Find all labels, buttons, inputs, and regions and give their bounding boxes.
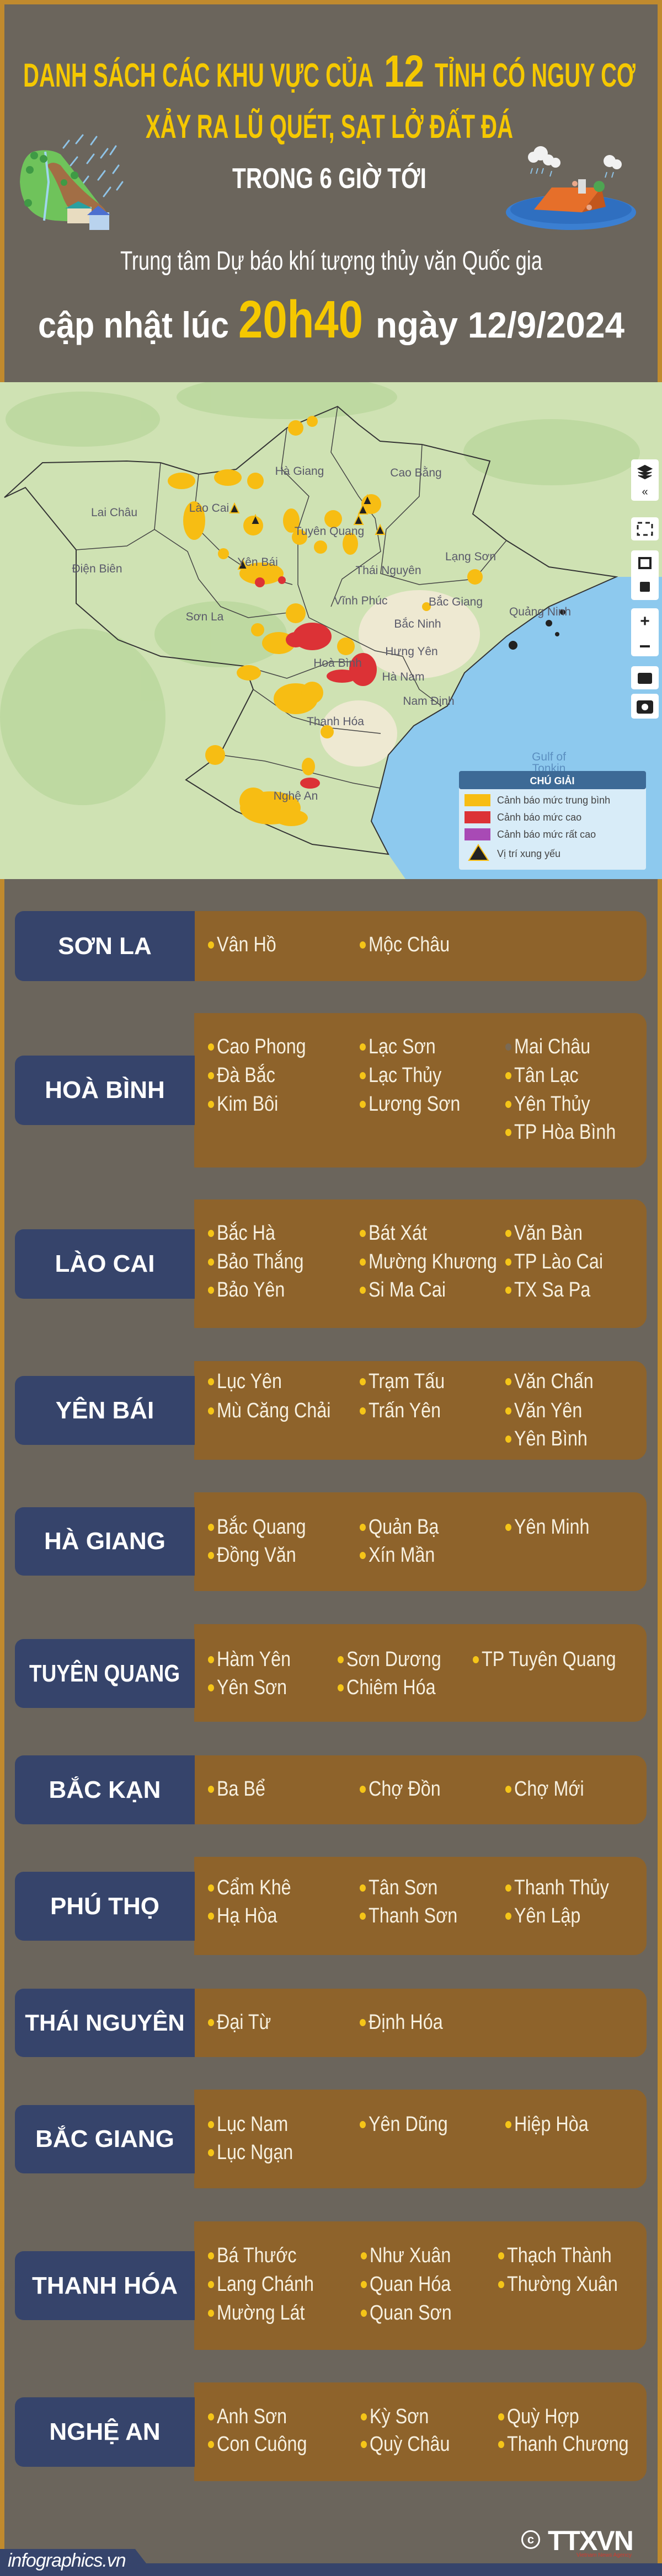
panel: Thanh Hóa: Quan Hóa bbox=[370, 2273, 451, 2296]
panel: Hoà Bình bbox=[15, 1013, 647, 1167]
update time line bbox=[38, 290, 624, 349]
panel: Lào Cai: TX Sa Pa bbox=[514, 1278, 590, 1302]
label: Sơn La: SƠN LA bbox=[58, 932, 152, 960]
panel: Yên Bái: Lục Yên bbox=[217, 1370, 282, 1393]
label: Lào Cai: LÀO CAI bbox=[55, 1250, 154, 1277]
panel: Tuyên Quang: Sơn Dương bbox=[346, 1648, 441, 1671]
label: Phú Thọ: PHÚ THỌ bbox=[50, 1893, 159, 1919]
panel: Bắc Giang: Lục Nam bbox=[217, 2113, 288, 2136]
panel: Lào Cai: Văn Bàn bbox=[514, 1222, 583, 1245]
label: Bắc Kạn bbox=[15, 1755, 195, 1824]
panel: Lào Cai: Bát Xát bbox=[369, 1222, 427, 1245]
map bbox=[0, 382, 662, 879]
legend: Cảnh báo mức cao bbox=[497, 812, 581, 823]
panel: Phú Thọ: Thanh Thủy bbox=[514, 1876, 609, 1899]
map toolbar: + bbox=[640, 612, 650, 630]
panel: Hà Giang: Xín Mần bbox=[369, 1544, 435, 1567]
subtitle source: Trung tâm Dự báo khí tượng thủy văn Quốc gia bbox=[120, 247, 542, 276]
panel: Hà Giang bbox=[15, 1492, 647, 1591]
panel: Hoà Bình: Lương Sơn bbox=[369, 1092, 460, 1116]
panel: Lào Cai bbox=[15, 1199, 647, 1328]
panel: Lào Cai: Bảo Thắng bbox=[217, 1250, 303, 1273]
panel: Nghệ An: Quỳ Châu bbox=[370, 2433, 450, 2456]
panel: Thái Nguyên bbox=[15, 1989, 647, 2057]
province labels: Hưng Yên bbox=[385, 645, 438, 658]
province labels: Hà Giang bbox=[275, 465, 324, 478]
sea bbox=[371, 577, 662, 879]
update time line: ngày 12/9/2024 bbox=[376, 304, 624, 345]
label: Hoà Bình bbox=[15, 1056, 195, 1125]
panel: Hà Giang: Bắc Quang bbox=[217, 1515, 306, 1539]
box: Phú Thọ list bbox=[194, 1857, 647, 1955]
map toolbar: « bbox=[642, 486, 648, 498]
box: Thái Nguyên list bbox=[194, 1989, 647, 2057]
label: Nghệ An: NGHỆ AN bbox=[49, 2418, 161, 2445]
legend: Cảnh báo mức rất cao bbox=[497, 829, 596, 840]
region outline bbox=[4, 406, 616, 854]
label: Phú Thọ bbox=[15, 1872, 195, 1941]
label: Tuyên Quang bbox=[15, 1639, 195, 1708]
update time line: cập nhật lúc bbox=[38, 304, 229, 345]
panel: Hoà Bình: Lạc Thủy bbox=[369, 1064, 441, 1087]
panel: Lào Cai: Bắc Hà bbox=[217, 1222, 275, 1245]
panel: Yên Bái: Trạm Tấu bbox=[369, 1370, 445, 1393]
panel: Hoà Bình: Tân Lạc bbox=[514, 1064, 579, 1087]
province labels: Sơn La bbox=[186, 610, 224, 623]
province labels: Thanh Hóa bbox=[307, 715, 364, 728]
panel: Hoà Bình: Kim Bôi bbox=[217, 1092, 278, 1116]
panel: Thanh Hóa: Quan Sơn bbox=[370, 2301, 452, 2325]
label: Yên Bái bbox=[15, 1376, 195, 1445]
panel: Bắc Giang: Lục Ngạn bbox=[217, 2141, 293, 2164]
warning areas bbox=[168, 416, 483, 826]
label: Thái Nguyên bbox=[15, 1989, 195, 2057]
panel: Bắc Kạn: Chợ Mới bbox=[514, 1777, 584, 1801]
panel: Tuyên Quang: Yên Sơn bbox=[217, 1676, 287, 1699]
province labels: Hoà Bình bbox=[313, 657, 362, 670]
panel: Sơn La bbox=[15, 911, 647, 981]
map toolbar bbox=[631, 459, 659, 719]
province labels: Nghệ An bbox=[274, 790, 318, 802]
panel: Thanh Hóa bbox=[15, 2221, 647, 2350]
panel: Nghệ An: Anh Sơn bbox=[217, 2405, 287, 2428]
panel: Bắc Giang: Hiệp Hòa bbox=[514, 2113, 589, 2136]
panel: Tuyên Quang: Hàm Yên bbox=[217, 1648, 291, 1671]
panel: Lào Cai: Si Ma Cai bbox=[369, 1278, 446, 1302]
province labels: Hà Nam bbox=[382, 671, 425, 683]
box: Bắc Giang list bbox=[194, 2090, 647, 2188]
panel: Yên Bái: Yên Bình bbox=[514, 1427, 588, 1450]
panel: Tuyên Quang bbox=[15, 1624, 647, 1722]
panel: Thanh Hóa: Như Xuân bbox=[370, 2244, 451, 2267]
label: Hoà Bình: HOÀ BÌNH bbox=[45, 1077, 165, 1104]
panel: Yên Bái bbox=[15, 1361, 647, 1460]
province labels: Điện Biên bbox=[72, 563, 122, 575]
icon: landslide bbox=[20, 135, 122, 230]
panel: Thanh Hóa: Lang Chánh bbox=[217, 2273, 314, 2296]
panel: Hà Giang: Đồng Văn bbox=[217, 1544, 296, 1567]
panel: Bắc Kạn: Chợ Đồn bbox=[369, 1777, 441, 1801]
province labels: Lào Cai bbox=[189, 502, 229, 515]
update time line: 20h40 bbox=[238, 290, 363, 349]
panel: Hoà Bình: TP Hòa Bình bbox=[514, 1121, 616, 1144]
panel: Yên Bái: Văn Chấn bbox=[514, 1370, 594, 1393]
panel: Hà Giang: Quản Bạ bbox=[369, 1515, 439, 1539]
panel: Nghệ An: Con Cuông bbox=[217, 2433, 307, 2456]
panel: Phú Thọ: Thanh Sơn bbox=[369, 1904, 457, 1927]
province labels: Tuyên Quang bbox=[295, 525, 364, 538]
panel: Bắc Giang: Yên Dũng bbox=[369, 2113, 448, 2136]
panel: Thái Nguyên: Đại Từ bbox=[217, 2011, 271, 2034]
label: Hà Giang bbox=[15, 1507, 195, 1576]
logo: TTXVN: Vietnam News Agency bbox=[576, 2552, 632, 2558]
panel: Thanh Hóa: Mường Lát bbox=[217, 2301, 305, 2325]
province labels: Bắc Giang bbox=[429, 596, 483, 608]
panel: Nghệ An: Kỳ Sơn bbox=[370, 2405, 429, 2428]
province labels: Lai Châu bbox=[91, 506, 137, 519]
legend: Cảnh báo mức trung bình bbox=[497, 795, 610, 806]
title line 1 bbox=[23, 46, 636, 97]
panel: Lào Cai: TP Lào Cai bbox=[514, 1250, 603, 1273]
province labels: Thái Nguyên bbox=[355, 564, 421, 577]
icon: flood bbox=[506, 146, 636, 230]
province labels: Gulf of bbox=[532, 751, 566, 763]
legend bbox=[459, 771, 646, 870]
province labels: Bắc Ninh bbox=[394, 618, 441, 630]
panel: Phú Thọ: Yên Lập bbox=[514, 1904, 580, 1927]
panel: Phú Thọ: Hạ Hòa bbox=[217, 1904, 277, 1927]
panel: Bắc Kạn: Ba Bể bbox=[217, 1777, 265, 1801]
panel: Hà Giang: Yên Minh bbox=[514, 1515, 589, 1539]
province labels: Tonkin bbox=[532, 762, 565, 775]
panel: Phú Thọ bbox=[15, 1857, 647, 1955]
legend: Vị trí xung yếu bbox=[497, 848, 560, 859]
panel: Thái Nguyên: Định Hóa bbox=[369, 2011, 443, 2034]
panel: Hoà Bình: Cao Phong bbox=[217, 1035, 306, 1058]
panel: Yên Bái: Mù Căng Chải bbox=[217, 1399, 330, 1422]
panel: Thanh Hóa: Thạch Thành bbox=[507, 2244, 612, 2267]
panel: Phú Thọ: Tân Sơn bbox=[369, 1876, 437, 1899]
title line 1: DANH SÁCH CÁC KHU VỰC CỦA bbox=[23, 57, 373, 94]
label: Tuyên Quang: TUYÊN QUANG bbox=[29, 1660, 180, 1686]
label: Bắc Giang bbox=[15, 2105, 195, 2173]
box: Hoà Bình list bbox=[194, 1013, 647, 1167]
panel: Phú Thọ: Cẩm Khê bbox=[217, 1876, 291, 1899]
box: Yên Bái list bbox=[194, 1361, 647, 1460]
panel: Thanh Hóa: Thường Xuân bbox=[507, 2273, 618, 2296]
panel: Thanh Hóa: Bá Thước bbox=[217, 2244, 297, 2267]
panel: Lào Cai: Bảo Yên bbox=[217, 1278, 285, 1302]
label: Thanh Hóa: THANH HÓA bbox=[32, 2272, 178, 2299]
label: Yên Bái: YÊN BÁI bbox=[56, 1396, 154, 1424]
panel: Bắc Kạn bbox=[15, 1755, 647, 1824]
label: Nghệ An bbox=[15, 2397, 195, 2467]
province labels: Quảng Ninh bbox=[509, 606, 571, 618]
panel: Hoà Bình: Yên Thủy bbox=[514, 1092, 590, 1116]
panel: Yên Bái: Trấn Yên bbox=[369, 1399, 441, 1422]
legend: CHÚ GIẢI bbox=[530, 775, 575, 786]
box: Tuyên Quang list bbox=[194, 1624, 647, 1722]
label: Sơn La bbox=[15, 911, 195, 981]
box: Lào Cai list bbox=[194, 1199, 647, 1328]
label: Hà Giang: HÀ GIANG bbox=[44, 1528, 166, 1555]
label: Thái Nguyên: THÁI NGUYÊN bbox=[25, 2010, 185, 2036]
panel: Lào Cai: Mường Khương bbox=[369, 1250, 497, 1273]
footer bar bbox=[0, 2549, 662, 2576]
province labels bbox=[72, 465, 571, 802]
province labels: Cao Bằng bbox=[390, 467, 442, 479]
label: Bắc Kạn: BẮC KẠN bbox=[49, 1776, 161, 1803]
header bbox=[20, 46, 636, 349]
panel: Tuyên Quang: Chiêm Hóa bbox=[346, 1676, 436, 1699]
panel: Hoà Bình: Lạc Sơn bbox=[369, 1035, 436, 1058]
logo: TTXVN: c bbox=[527, 2532, 534, 2546]
box: Thanh Hóa list bbox=[194, 2221, 647, 2350]
panel: Nghệ An: Quỳ Hợp bbox=[507, 2405, 579, 2428]
label: Thanh Hóa bbox=[15, 2251, 195, 2320]
footer text: infographics.vn: infographics.vn bbox=[8, 2550, 126, 2571]
panel: Yên Bái: Văn Yên bbox=[514, 1399, 582, 1422]
box: Hà Giang list bbox=[194, 1492, 647, 1591]
box: Sơn La list bbox=[194, 911, 647, 981]
title line 1: 12 bbox=[384, 46, 424, 97]
province labels: Yên Bái bbox=[237, 556, 278, 569]
panel: Nghệ An bbox=[15, 2382, 647, 2481]
panel: Hoà Bình: Mai Châu bbox=[514, 1035, 590, 1058]
panel: Tuyên Quang: TP Tuyên Quang bbox=[482, 1648, 616, 1671]
box: Bắc Kạn list bbox=[194, 1755, 647, 1824]
label: Bắc Giang: BẮC GIANG bbox=[35, 2125, 174, 2152]
panel: Bắc Giang bbox=[15, 2090, 647, 2188]
panel: Hoà Bình: Đà Bắc bbox=[217, 1064, 275, 1087]
box: Nghệ An list bbox=[194, 2382, 647, 2481]
panel: Sơn La: Vân Hồ bbox=[217, 933, 276, 956]
province labels: Vĩnh Phúc bbox=[334, 595, 387, 607]
title line 3: TRONG 6 GIỜ TỚI bbox=[232, 163, 426, 195]
panel: Sơn La: Mộc Châu bbox=[369, 933, 450, 956]
province labels: Lạng Sơn bbox=[445, 550, 496, 563]
panel: Nghệ An: Thanh Chương bbox=[507, 2433, 629, 2456]
logo: TTXVN: TTXVN bbox=[548, 2525, 633, 2556]
label: Lào Cai bbox=[15, 1229, 195, 1299]
province labels: Nam Định bbox=[403, 695, 455, 708]
